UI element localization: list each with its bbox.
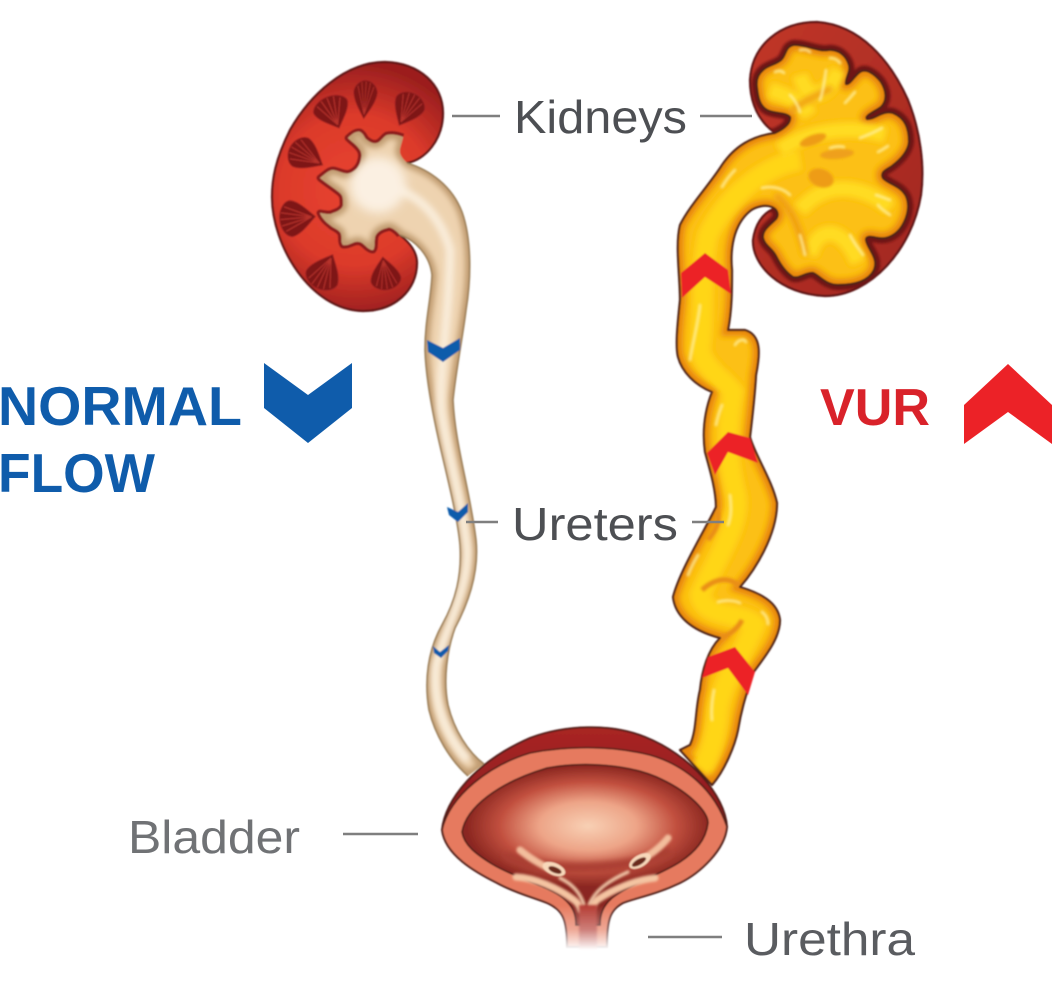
bladder dome — [442, 727, 727, 830]
renal pyramids — [278, 80, 429, 295]
label: Urethra with leader line: Urethra — [744, 913, 915, 965]
normal flow heading: FLOW — [0, 442, 155, 504]
red reflux chevrons on ureter — [681, 253, 758, 695]
icon: red up chevron — [964, 364, 1052, 444]
bladder — [442, 727, 727, 952]
label: Kidneys with leader lines: Kidneys — [514, 91, 687, 143]
trigone shadow — [505, 850, 670, 867]
illustration artwork — [272, 22, 922, 952]
bladder outer wall — [442, 727, 727, 947]
normal flow heading — [0, 375, 242, 504]
renal pelvis and left ureter with normal flow — [320, 132, 484, 776]
VUR swollen kidney outer tissue — [673, 22, 922, 785]
label: Bladder with leader line: Bladder — [128, 811, 300, 863]
icon: blue down chevron — [264, 363, 352, 443]
trigone folds — [516, 838, 668, 910]
bladder cavity — [462, 765, 708, 925]
urethra — [555, 902, 619, 952]
VUR dilated ureter and swollen renal pelvis — [673, 45, 909, 785]
label: Ureters with leader lines: Ureters — [512, 498, 678, 550]
VUR heading: VUR — [820, 379, 930, 437]
calyx dark band — [320, 132, 403, 250]
normal kidney cortex — [272, 62, 443, 311]
normal flow heading: NORMAL — [0, 375, 242, 437]
blue flow chevrons on left ureter — [427, 338, 468, 658]
ureter openings — [541, 850, 653, 879]
